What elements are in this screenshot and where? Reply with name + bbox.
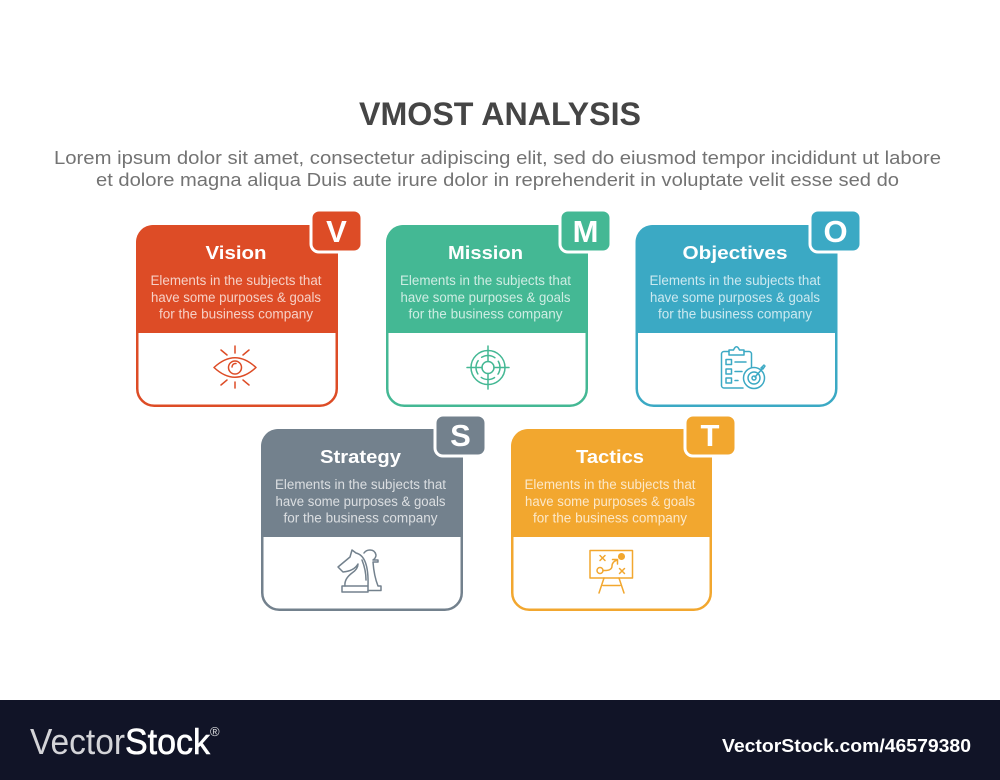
badge: T: T bbox=[701, 418, 720, 453]
logo: VectorStock bbox=[30, 721, 220, 762]
description: Strategy: for the business company bbox=[284, 510, 438, 526]
description: Vision: Elements in the subjects that bbox=[150, 273, 322, 288]
subtitle text: Lorem ipsum dolor sit amet, consectetur adipiscing elit, sed do eiusmod tempor incididunt ut labore bbox=[54, 147, 941, 168]
description: Objectives: for the business company bbox=[658, 306, 812, 322]
icon: eye bbox=[214, 346, 256, 388]
badge: T bbox=[685, 415, 736, 456]
subtitle text: et dolore magna aliqua Duis aute irure dolor in reprehenderit in voluptate velit esse sed do bbox=[96, 169, 899, 190]
badge: O bbox=[810, 210, 861, 252]
description: Objectives: have some purposes & goals bbox=[650, 290, 820, 305]
icon: clipboard with target bbox=[722, 347, 765, 388]
footer url: VectorStock.com/46579380 bbox=[722, 735, 971, 756]
heading: Tactics: Tactics bbox=[576, 446, 644, 467]
logo: VectorStock: Vector bbox=[30, 721, 125, 762]
description: Strategy: Elements in the subjects that bbox=[275, 477, 446, 492]
description: Objectives: Elements in the subjects that bbox=[650, 273, 821, 288]
badge: S bbox=[435, 415, 486, 456]
icon: target crosshair bbox=[467, 346, 509, 389]
subtitle text bbox=[54, 147, 941, 190]
description: Objectives bbox=[650, 273, 821, 322]
badge: M: M bbox=[573, 214, 598, 249]
description: Mission: have some purposes & goals bbox=[400, 290, 571, 305]
icon: chess knight and pawn bbox=[338, 550, 381, 592]
description: Vision bbox=[150, 273, 322, 322]
description: Tactics: for the business company bbox=[533, 510, 687, 526]
panel: Tactics bbox=[511, 415, 736, 610]
badge: O: O bbox=[823, 214, 848, 249]
panel: Mission bbox=[386, 210, 611, 406]
badge: S: S bbox=[450, 418, 471, 453]
description: Vision: for the business company bbox=[159, 306, 313, 322]
heading: Strategy: Strategy bbox=[320, 446, 402, 467]
description: Mission: for the business company bbox=[408, 306, 563, 322]
heading: Vision: Vision bbox=[206, 242, 266, 263]
description: Mission: Elements in the subjects that bbox=[400, 273, 571, 288]
description: Strategy bbox=[275, 477, 446, 526]
badge: M bbox=[560, 210, 611, 252]
title: VMOST ANALYSIS bbox=[359, 96, 641, 132]
description: Tactics: have some purposes & goals bbox=[525, 494, 695, 509]
icon: tactics board bbox=[590, 550, 632, 593]
heading: Objectives: Objectives bbox=[682, 242, 788, 263]
panel: Objectives bbox=[636, 210, 861, 406]
footer bar bbox=[0, 700, 1000, 780]
description: Tactics: Elements in the subjects that bbox=[524, 477, 696, 492]
badge: V: V bbox=[326, 214, 347, 249]
logo: VectorStock: Stock bbox=[125, 721, 211, 762]
description: Tactics bbox=[524, 477, 696, 526]
panel: Vision bbox=[136, 210, 362, 406]
description: Mission bbox=[400, 273, 571, 322]
description: Vision: have some purposes & goals bbox=[151, 290, 321, 305]
logo: VectorStock: ® bbox=[210, 724, 220, 739]
badge: V bbox=[311, 210, 362, 252]
panel: Strategy bbox=[261, 415, 486, 610]
heading: Mission: Mission bbox=[448, 242, 523, 263]
description: Strategy: have some purposes & goals bbox=[276, 494, 446, 509]
